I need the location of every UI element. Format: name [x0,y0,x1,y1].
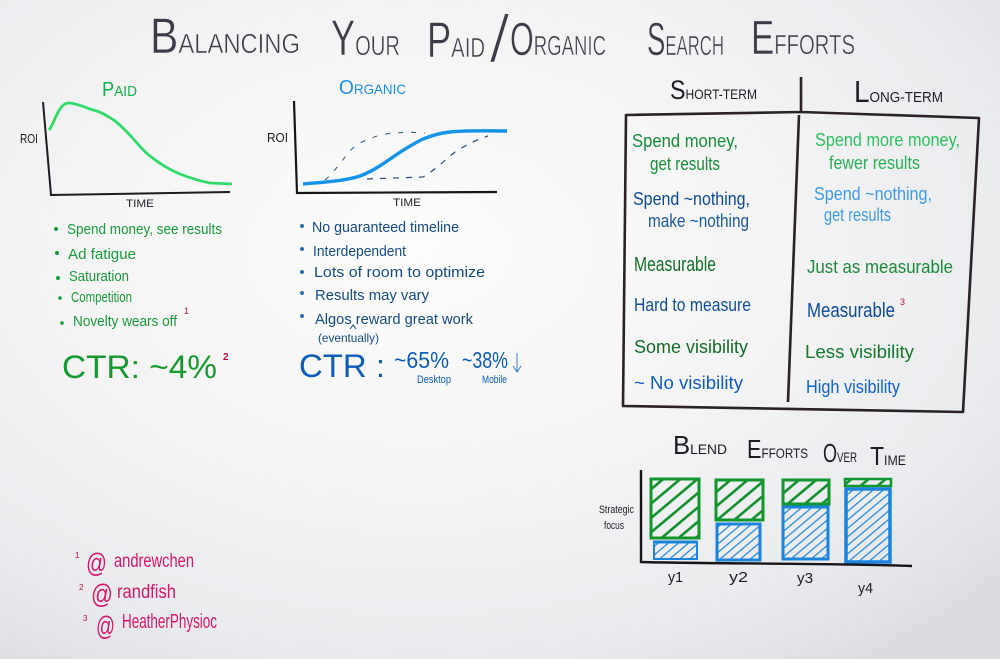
short-term cells: Measurable [634,254,716,276]
organic bullet list: Lots of room to optimize [314,264,485,281]
long-term cells: Just as measurable [807,257,953,277]
short-term cells [632,131,751,393]
paid chart: ROI [20,131,38,146]
chart heading: OVER [823,438,857,468]
paid bullet list: Spend money, see results [67,221,222,238]
panel: comparison table [623,74,979,412]
source 1: andrewchen [114,551,194,572]
short-term cells: Spend money, [632,131,738,151]
paid bullet list: Ad fatigue [68,246,136,263]
chart heading: TIME [870,441,906,471]
source 2 [79,579,176,609]
paid CTR: CTR: ~4% [62,349,217,385]
paid CTR: 2 [223,352,229,363]
year labels: y1 [668,569,683,586]
organic chart [267,101,507,209]
short-term cells: get results [650,154,720,174]
source 3: HeatherPhysioc [122,611,217,633]
year labels: y2 [729,569,748,586]
long-term cells: 3 [900,297,905,307]
title: BALANCING [150,8,300,64]
organic bullet list: Results may vary [315,287,429,304]
axis label: focus [604,520,624,532]
column heading: short-term: SHORT-TERM [670,75,757,105]
axes [641,470,912,566]
organic bullet list [300,219,485,345]
title: / [489,1,510,77]
organic CTR: Desktop [417,374,451,386]
axis label [599,504,634,532]
organic CTR: Mobile [482,374,507,386]
paid bullet list: Saturation [69,268,129,285]
organic chart: TIME [393,197,421,209]
long-term cells: Measurable [807,300,895,322]
paid bullet list [54,221,222,330]
panel: organic [267,77,521,386]
paid heading: PAID [102,79,137,101]
title: ORGANIC [510,13,606,65]
paid chart: TIME [126,198,154,210]
organic CTR [299,347,521,386]
stacked bars [651,479,891,562]
long-term cells: get results [824,205,891,225]
paid bullet list: 1 [184,306,189,316]
source 2: @ [91,579,113,609]
title [150,1,855,77]
table frame [623,77,979,412]
long-term cells [805,130,960,397]
source 2: randfish [117,582,176,603]
organic CTR: CTR : [299,348,385,384]
source 1: @ [86,548,107,578]
panel: blend chart [599,430,912,597]
source 3 [83,611,217,641]
axis label: Strategic [599,504,634,516]
source 1 [75,548,194,578]
panel: paid [20,79,232,385]
organic CTR: ~65% [394,347,449,373]
source 2: 2 [79,583,84,592]
source 3: @ [96,611,115,641]
short-term cells: ~ No visibility [634,373,743,393]
sources [75,548,217,641]
paid bullet list: Novelty wears off [73,313,178,330]
long-term cells: Less visibility [805,342,914,362]
long-term cells: fewer results [829,153,920,173]
paid bullet list: Competition [71,289,132,306]
organic bullet list: Algos reward great work [315,311,473,328]
title: YOUR [331,10,400,66]
organic heading: ORGANIC [339,77,406,99]
organic chart: ROI [267,130,288,145]
short-term cells: Some visibility [634,337,748,357]
title: EFFORTS [751,12,855,65]
long-term cells: High visibility [806,377,900,397]
year labels [668,569,873,597]
chart heading [673,430,906,471]
organic bullet list: No guaranteed timeline [312,219,459,236]
paid chart [20,102,232,210]
year labels: y3 [797,570,813,587]
source 3: 3 [83,614,88,623]
long-term cells: Spend ~nothing, [814,184,932,204]
short-term cells: Spend ~nothing, [633,189,750,209]
source 1: 1 [75,551,80,560]
chart heading: EFFORTS [747,434,808,464]
organic CTR: ~38% [462,347,508,373]
year labels: y4 [858,580,873,597]
title: SEARCH [647,13,724,65]
long-term cells: Spend more money, [815,130,960,150]
title: PAID [427,12,485,68]
organic bullet list: (eventually) [318,331,379,345]
short-term cells: Hard to measure [634,295,751,315]
chart heading: BLEND [673,430,727,460]
short-term cells: make ~nothing [648,211,749,231]
column heading: long-term: LONG-TERM [854,74,943,109]
organic bullet list: Interdependent [313,243,407,260]
